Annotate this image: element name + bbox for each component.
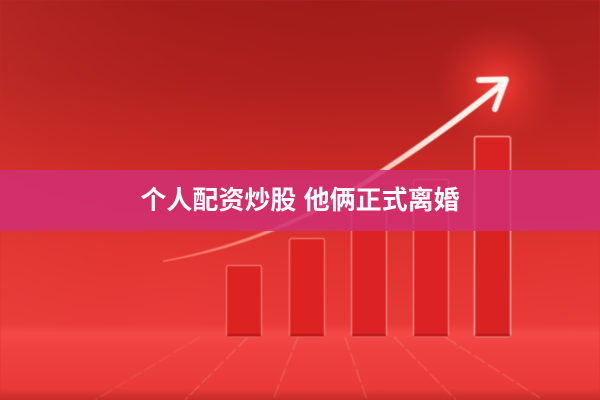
title band [0, 170, 600, 231]
bar 1 [226, 266, 262, 336]
bar 3 [352, 208, 386, 336]
floor with perspective lines [0, 322, 600, 400]
bar 4 [414, 180, 448, 336]
bar 5 [474, 136, 510, 336]
rising arrow [163, 80, 506, 262]
title: 个人配资炒股 他俩正式离婚 [140, 185, 460, 215]
bar 2 [290, 238, 324, 336]
